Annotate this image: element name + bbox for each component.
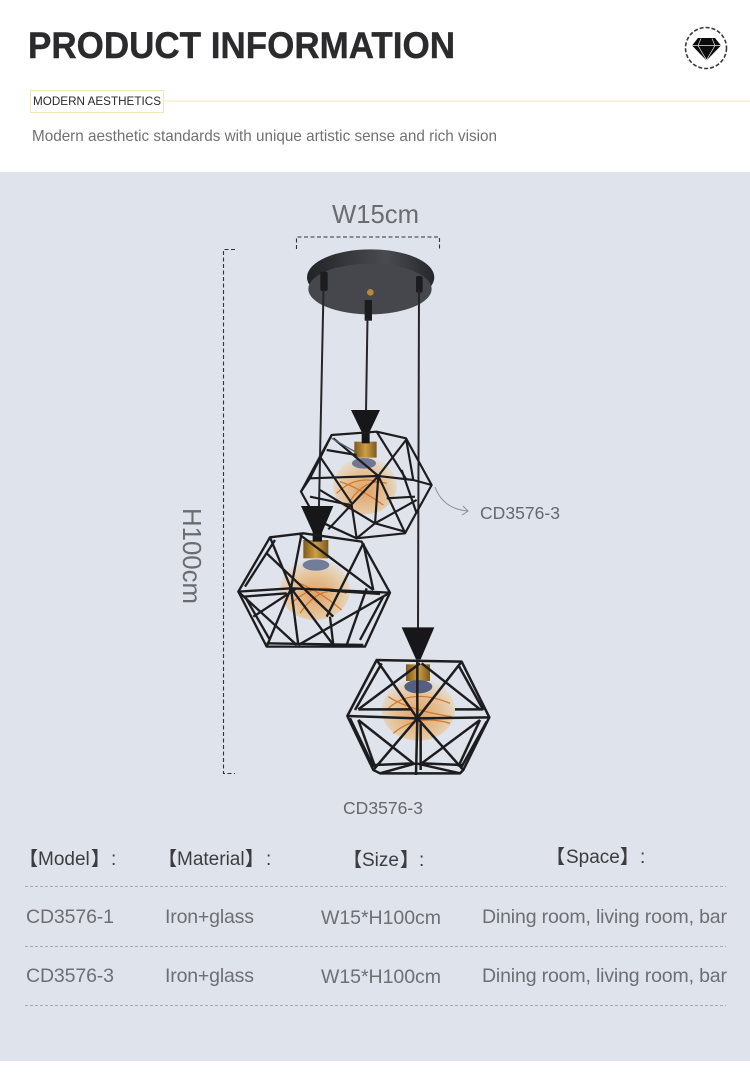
title: PRODUCT INFORMATION: [28, 25, 455, 66]
width dimension: W15cm: [332, 201, 419, 229]
table header row: 】: [91, 848, 110, 870]
table header row: :: [266, 849, 271, 870]
pendant lamp: left: [238, 506, 390, 647]
spec table: [19, 846, 728, 1006]
table header row: 】: [400, 849, 419, 871]
callout arrow: [435, 487, 468, 515]
table header row: :: [111, 849, 116, 870]
table row: CD3576-3: Iron+glass: [165, 965, 254, 987]
table header row: 【: [546, 846, 565, 868]
table row: CD3576-3: Dining room, living room, bar: [482, 965, 728, 987]
table row: CD3576-1: [26, 906, 728, 929]
table row: CD3576-1: Dining room, living room, bar: [482, 906, 728, 928]
ceiling canopy: [307, 249, 434, 321]
height dimension: H100cm: [177, 508, 205, 604]
table header row: [19, 846, 645, 871]
table header row: Model: [38, 849, 90, 870]
table header row: 】: [620, 846, 639, 868]
callout label: CD3576-3: CD3576-3: [480, 503, 560, 523]
table header row: Material: [177, 849, 245, 870]
subtitle tag: modern aesthetics: MODERN AESTHETICS: [33, 94, 161, 108]
icon: diamond badge: [686, 28, 726, 68]
table row: CD3576-3: W15*H100cm: [321, 966, 441, 988]
table header row: :: [640, 847, 645, 868]
pendant lamp: bottom: [347, 627, 489, 775]
pendant lamp: top: [301, 410, 432, 538]
description text: Modern aesthetic standards with unique artistic sense and rich vision: [32, 128, 497, 145]
table row: CD3576-1: Iron+glass: [165, 906, 254, 928]
width dimension: [296, 201, 440, 249]
table header row: 【: [19, 848, 38, 870]
table header row: 】: [245, 848, 264, 870]
table row: CD3576-1: CD3576-1: [26, 906, 114, 928]
table header row: :: [419, 850, 424, 871]
panel: white header background: [0, 0, 750, 172]
table row: CD3576-3: [26, 965, 728, 988]
diagram caption: CD3576-3: [343, 798, 423, 818]
height dimension: [177, 250, 235, 774]
table header row: 【: [343, 849, 362, 871]
table header row: Space: [566, 847, 620, 868]
table row: CD3576-1: W15*H100cm: [321, 907, 441, 929]
suspension cords: [318, 290, 419, 630]
subtitle tag: modern aesthetics: [30, 90, 750, 112]
table header row: Size: [362, 850, 399, 871]
table row: CD3576-3: CD3576-3: [26, 965, 114, 987]
table header row: 【: [158, 848, 177, 870]
